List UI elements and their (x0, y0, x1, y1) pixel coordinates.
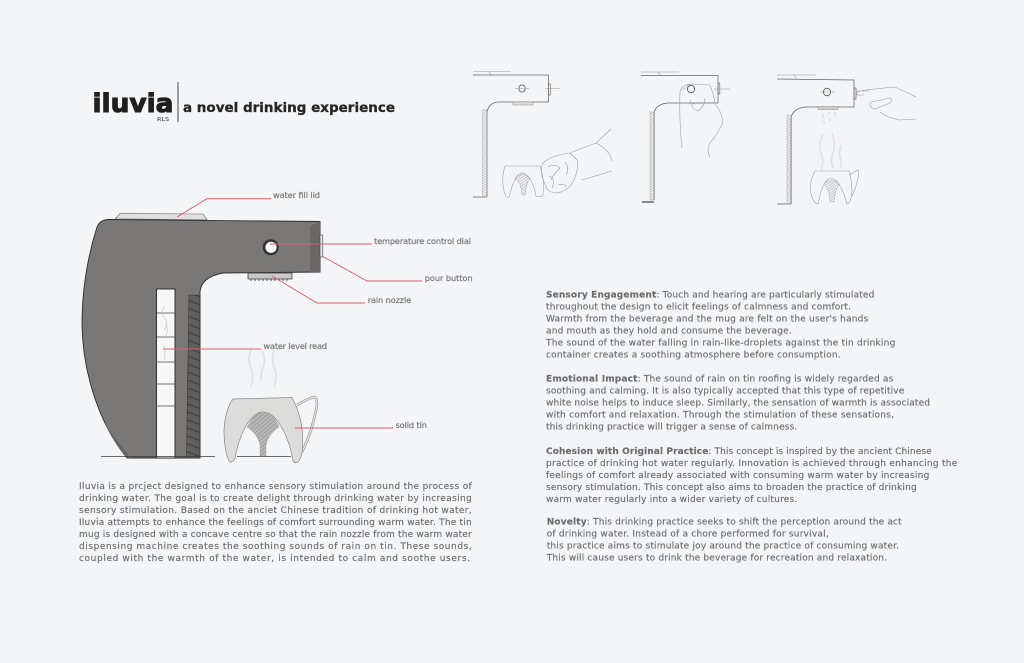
text block: sensory engagement: and mouth as they hold and consume the beverage. (546, 326, 792, 336)
text block: sensory engagement (545, 290, 895, 360)
text block: novelty: Novelty: This drinking practice seeks to shift the perception around the act (547, 518, 902, 528)
sketch 3: dispenser outline (777, 75, 856, 204)
text block: emotional impact (546, 375, 930, 433)
text block: emotional impact: this drinking practice will trigger a sense of calmness. (546, 423, 797, 433)
callout: rain nozzle (272, 276, 411, 305)
text block: cohesion with original practice (546, 447, 958, 505)
callout: water level read: water level read (264, 341, 327, 351)
sketch 3: droplets (822, 112, 835, 124)
intro paragraph (79, 482, 473, 564)
sketch 1: mug (503, 166, 544, 197)
intro paragraph: Iluvia is a prcject designed to enhance sensory stimulation around the process of (79, 482, 473, 492)
device: arm end shading (310, 222, 320, 272)
text block: emotional impact: with comfort and relaxation. Through the stimulation of these sensations, (546, 411, 894, 421)
logo subtext: RLS: RLS (157, 117, 169, 123)
text block: cohesion with original practice: feelings of comfort already associated with consuming warm water by increasing (546, 471, 929, 481)
device: water fill lid (115, 214, 207, 220)
text block: novelty: this practice aims to stimulate joy around the practice of consuming water. (547, 542, 899, 552)
sketch: hand turning dial (641, 72, 730, 203)
mug: body (224, 398, 303, 463)
callout: pour button: pour button (425, 273, 473, 283)
steam (249, 350, 276, 387)
device: body (82, 220, 320, 458)
text block: sensory engagement: container creates a soothing atmosphere before consumption. (546, 350, 841, 360)
title block (92, 82, 395, 123)
sketch: hand holding mug (473, 72, 612, 197)
text block: cohesion with original practice: warm water regularly into a wider variety of cultures. (546, 495, 797, 505)
intro paragraph: mug is designed with a concave centre so that the rain nozzle from the warm water (79, 530, 472, 540)
sketch 2: dispenser outline (641, 72, 730, 203)
intro paragraph: Iluvia attempts to enhance the feelings of comfort surrounding warm water. The tin (79, 518, 472, 528)
sketch 2: hand (680, 84, 723, 157)
logo: iluvia: iluvia (92, 89, 174, 119)
callout: temperature control dial: temperature control dial (374, 236, 471, 246)
sketch 3: hand (857, 87, 916, 120)
text block: cohesion with original practice: sensory stimulation. This concept also aims to broaden the practice of drinking (546, 483, 917, 493)
mug: hatched concave centre (247, 412, 279, 456)
text block: sensory engagement: Warmth from the beverage and the mug are felt on the user's hands (546, 314, 869, 324)
callout: solid tin (295, 420, 427, 430)
sketch 3: mug (810, 170, 858, 204)
mug: handle (297, 397, 317, 452)
text block: cohesion with original practice: practice of drinking hot water regularly. Innovation is achieved through enhancing the (546, 459, 958, 469)
ground line (101, 456, 291, 458)
sketch: finger pressing pour button (777, 75, 916, 204)
intro paragraph: dispensing machine creates the soothing sounds of rain on tin. These sounds, (79, 542, 472, 552)
callout: pour button (322, 256, 473, 283)
text block: sensory engagement: Sensory Engagement: Touch and hearing are particularly stimulated (546, 290, 874, 300)
device: pour button (320, 235, 323, 257)
text block: sensory engagement: The sound of the water falling in rain-like-droplets against the tin drinking (545, 338, 895, 348)
text block: emotional impact: Emotional Impact: The sound of rain on tin roofing is widely regarded as (546, 375, 894, 385)
intro paragraph: drinking water. The goal is to create delight through drinking water by increasing (79, 494, 472, 504)
text block: emotional impact: white noise helps to induce sleep. Similarly, the sensation of warmth is associated (546, 399, 930, 409)
callout: rain nozzle: rain nozzle (368, 295, 411, 305)
device: temperature control dial (263, 239, 279, 255)
main device illustration (82, 214, 323, 463)
callout labels (163, 190, 473, 430)
intro paragraph: coupled with the warmth of the water, is intended to calm and soothe users. (79, 554, 470, 564)
callout: solid tin: solid tin (396, 420, 427, 430)
callout: water fill lid: water fill lid (273, 190, 320, 200)
text block: novelty: This will cause users to drink the beverage for recreation and relaxation. (546, 554, 887, 564)
device: hatched column (186, 295, 200, 458)
title divider (177, 82, 179, 122)
text block: sensory engagement: throughout the design to elicit feelings of calmness and comfort. (546, 302, 851, 312)
device: rain nozzle (248, 273, 292, 281)
sketch 1: dispenser outline (473, 72, 560, 197)
sketch 3: steam (820, 133, 841, 170)
text block: novelty: of drinking water. Instead of a chore performed for survival, (547, 530, 829, 540)
sketch 1: hand and forearm (541, 129, 612, 193)
text block: emotional impact: soothing and calming. It is also typically accepted that this type of repetitive (546, 387, 905, 397)
device: water level window (156, 289, 175, 458)
tagline: a novel drinking experience (183, 100, 395, 116)
text block: cohesion with original practice: Cohesion with Original Practice: This concept is inspired by the ancient Chinese (546, 447, 932, 457)
device: base shadow (103, 420, 131, 458)
text block: novelty (546, 518, 902, 564)
callout: water fill lid (177, 190, 320, 217)
intro paragraph: sensory stimulation. Based on the anciet Chinese tradition of drinking hot water, (79, 506, 472, 516)
